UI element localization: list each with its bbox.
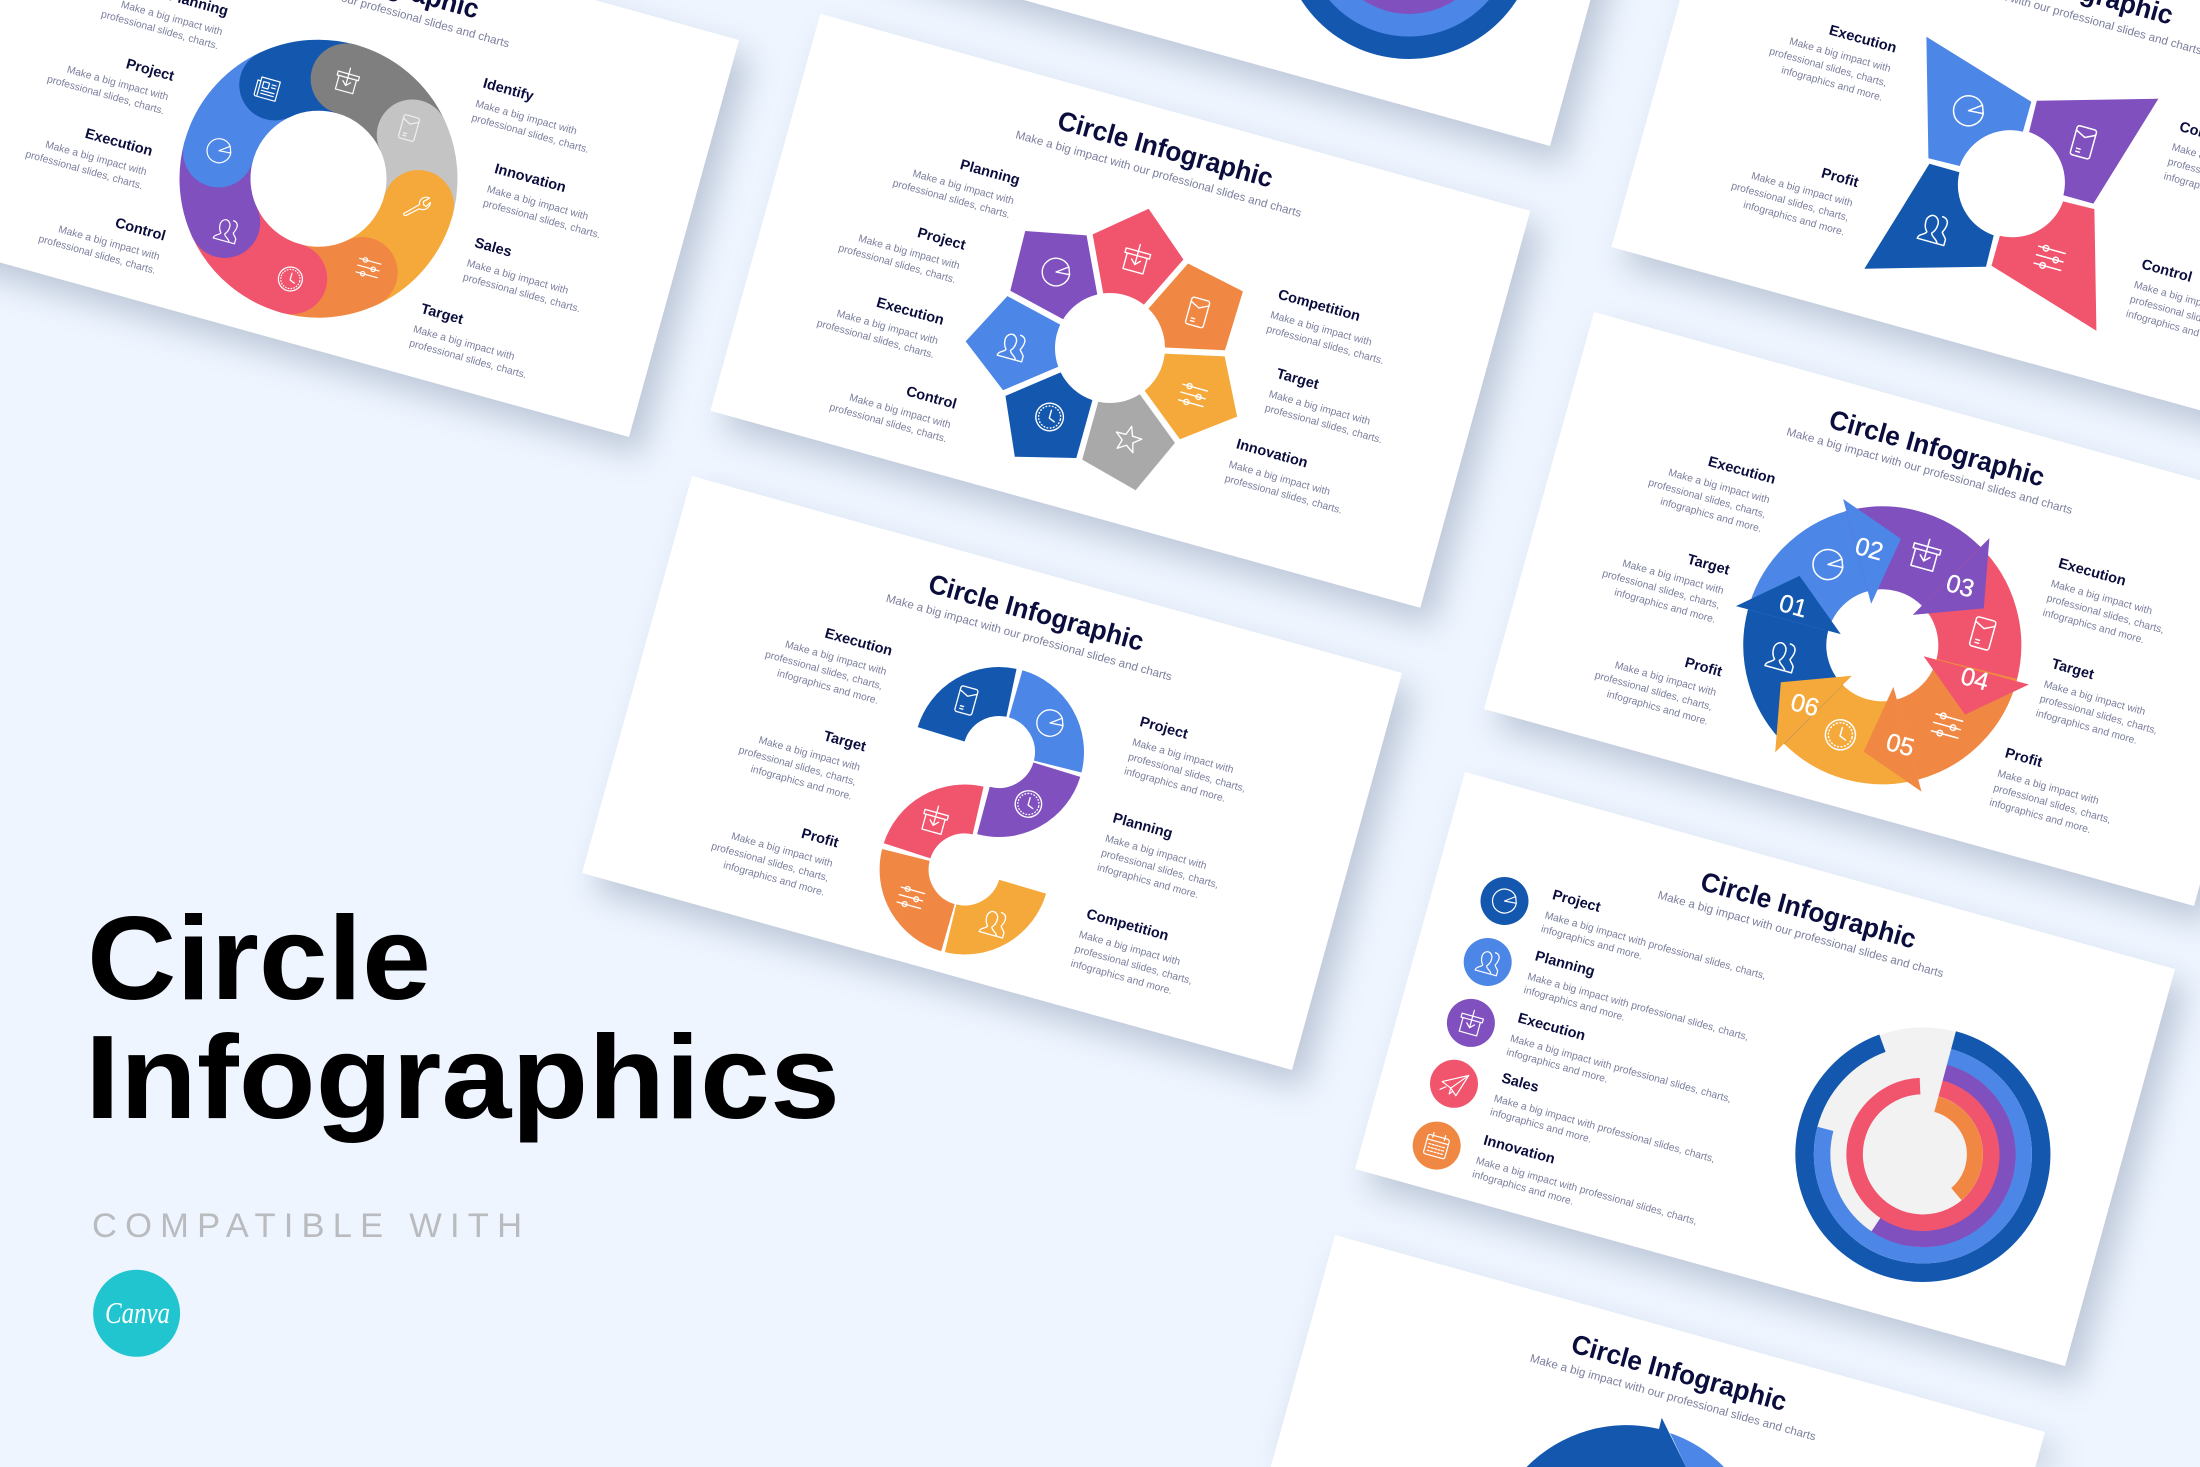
- panel: bottom slide partially visible: [1271, 1235, 2057, 1467]
- slide card: [710, 14, 1542, 626]
- label: Target left: Make a big impact with: [1621, 558, 1725, 597]
- label: Execution: [1764, 9, 1898, 104]
- star icons: [1917, 92, 2097, 273]
- legend item: Planning: infographics and more.: [1522, 985, 1626, 1024]
- label: Execution: professional slides, charts,: [1768, 46, 1888, 89]
- label: Control: [828, 365, 958, 445]
- label: Innovation: professional slides, charts.: [1223, 473, 1343, 517]
- label: Target: [733, 708, 868, 803]
- legend item: Innovation: Make a big impact with professional slides, charts,: [1475, 1156, 1698, 1227]
- S-curve icons: [897, 685, 1066, 938]
- subtitle: Make a big impact with our professional slides and charts: [1785, 426, 2074, 517]
- label: Execution right: infographics and more.: [2041, 608, 2145, 646]
- icon: Canva logo: Canva: [105, 1295, 170, 1330]
- legend item: Sales: Sales: [1500, 1070, 1540, 1096]
- circular arrows: [1736, 487, 2029, 803]
- label: Project: infographics and more.: [1123, 766, 1227, 805]
- label: Project: [46, 37, 176, 117]
- label: Competition: professional slides, charts,: [1073, 944, 1193, 987]
- donut chart: [175, 35, 462, 322]
- legend item: Planning: [1464, 938, 1756, 1057]
- label: Competition: Make a big impact with: [1269, 310, 1373, 349]
- label: Execution: Make a big impact with: [835, 309, 939, 347]
- label: Execution right: Make a big impact with: [2049, 579, 2154, 617]
- concentric rings: [1281, 0, 1537, 59]
- legend item: Project: [1480, 877, 1773, 996]
- label: Control: professional slides, charts.: [828, 402, 948, 445]
- label: Execution: [24, 112, 154, 192]
- label: Target: Target: [419, 301, 465, 328]
- label: Target right: Target: [2050, 656, 2096, 683]
- main heading: Infographics: [85, 1011, 840, 1144]
- label: Planning: professional slides, charts,: [1100, 848, 1220, 891]
- label: Innovation: [482, 161, 612, 241]
- label: Innovation: Make a big impact with: [1227, 460, 1331, 498]
- label: Profit left: Make a big impact with: [1613, 660, 1718, 699]
- panel: middle slide with S-curve: [582, 476, 1414, 1088]
- label: Profit: professional slides, charts,: [710, 841, 830, 884]
- label: Target right: Make a big impact with: [2042, 679, 2147, 718]
- label: Planning: Make a big impact with: [911, 169, 1015, 207]
- label: Profit: [706, 804, 840, 899]
- legend item: Innovation: Innovation: [1482, 1133, 1557, 1168]
- panel: right slide with circular arrows: [1484, 312, 2200, 924]
- legend item: Execution: [1447, 999, 1739, 1119]
- legend item: Sales: [1430, 1060, 1723, 1179]
- label: Execution left: Make a big impact with: [1667, 468, 1771, 506]
- label: Control: [37, 197, 167, 277]
- label: Competition: professional slides, charts.: [1265, 324, 1385, 367]
- label: Innovation: professional slides, charts.: [482, 198, 602, 241]
- label: Planning: [891, 141, 1022, 221]
- legend item: Planning: Make a big impact with professional slides, charts,: [1526, 972, 1750, 1043]
- label: Competition: infographics and more.: [1069, 958, 1173, 997]
- main heading: Circle: [87, 892, 431, 1025]
- label: Control: Make a big impact with: [57, 224, 161, 263]
- main heading: [85, 892, 840, 1144]
- legend item: Planning: Planning: [1533, 948, 1597, 980]
- label: Execution: Make a big impact with: [784, 639, 888, 678]
- label: Profit left: Profit: [1683, 655, 1724, 680]
- label: Execution: professional slides, charts.: [24, 149, 144, 192]
- label: Project: Make a big impact with: [66, 65, 170, 103]
- label: Project: Project: [1138, 714, 1190, 743]
- compatible with label: COMPATIBLE WITH: [92, 1207, 522, 1245]
- panel: top left slide with donut: [0, 0, 751, 455]
- label: Target: professional slides, charts.: [1264, 403, 1383, 446]
- label: Identify: [470, 75, 601, 156]
- label: Target: [408, 301, 538, 381]
- label: Profit: infographics and more.: [722, 860, 826, 899]
- label: Project: [1123, 714, 1257, 809]
- subtitle: Make a big impact with our professional slides and charts: [1656, 890, 1945, 980]
- label: Execution: infographics and more.: [1780, 65, 1884, 104]
- legend item: Execution: Execution: [1516, 1010, 1587, 1044]
- label: Profit: infographics and more.: [1742, 200, 1846, 238]
- donut icons: [204, 65, 432, 294]
- title: Circle Infographic: [925, 569, 1147, 657]
- label: Planning: Planning: [958, 157, 1022, 189]
- label: Project: professional slides, charts.: [46, 74, 166, 117]
- label: Project: Make a big impact with: [857, 233, 961, 272]
- panel: top right slide with four point star: [1612, 0, 2200, 462]
- star segments: [1864, 37, 2158, 331]
- arrow numbers: 02: [1852, 532, 1886, 566]
- label: Execution: Execution: [823, 626, 894, 660]
- label: Profit: professional slides, charts,: [1730, 181, 1850, 224]
- label: Sales: professional slides, charts.: [462, 272, 581, 315]
- label: Innovation: Innovation: [493, 161, 568, 196]
- label: Execution: professional slides, charts.: [815, 318, 935, 361]
- label: Profit left: [1589, 633, 1724, 728]
- label: Execution left: [1643, 440, 1777, 535]
- label: Target: Make a big impact with: [412, 324, 516, 363]
- label: Competition: Competition: [1276, 287, 1362, 325]
- label: Project: Make a big impact with: [1131, 737, 1235, 776]
- label: Profit left: professional slides, charts,: [1593, 670, 1713, 713]
- label: Competition: [1265, 286, 1395, 367]
- label: Sales: [462, 235, 592, 315]
- label: Target: [1264, 366, 1394, 446]
- label: Profit: Profit: [799, 826, 840, 851]
- label: Execution right: [2041, 555, 2176, 651]
- label: Project: professional slides, charts.: [837, 243, 957, 286]
- legend item: Innovation: infographics and more.: [1471, 1169, 1575, 1208]
- label: Control: Control: [113, 215, 167, 245]
- icon: Canva logo: [93, 1270, 180, 1357]
- label: Target: professional slides, charts.: [408, 338, 528, 381]
- label: Execution: Execution: [875, 295, 946, 329]
- label: Competition: Competition: [1085, 906, 1170, 944]
- label: Competition: [2162, 119, 2200, 214]
- label: Project: Project: [916, 225, 967, 254]
- legend item: Project: infographics and more.: [1540, 924, 1644, 962]
- label: Planning: professional slides, charts.: [100, 9, 220, 52]
- panel: lower right slide with radial bars: [1355, 772, 2187, 1384]
- pentagon segments: [963, 196, 1261, 499]
- legend item: Project: Project: [1551, 887, 1602, 916]
- subtitle: Make a big impact with our professional slides and charts: [1529, 1353, 1817, 1444]
- label: Target left: infographics and more.: [1613, 587, 1717, 626]
- arrow icons: [1765, 536, 1996, 753]
- label: Execution right: Execution: [2057, 556, 2128, 590]
- label: Profit: Make a big impact with: [730, 831, 834, 870]
- label: Execution: [760, 612, 894, 707]
- label: Execution: Execution: [1827, 23, 1898, 57]
- legend item: Project: Make a big impact with professional slides, charts,: [1543, 910, 1767, 982]
- arrow numbers: 06: [1788, 688, 1822, 722]
- label: Execution: Make a big impact with: [44, 140, 148, 178]
- label: Competition: [1069, 906, 1204, 1001]
- label: Target: Make a big impact with: [1267, 389, 1372, 428]
- label: Control: Control: [2140, 257, 2194, 286]
- slide card: [1355, 772, 2187, 1384]
- title: Circle Infographic: [1054, 105, 1276, 193]
- label: Target left: professional slides, charts,: [1601, 568, 1721, 611]
- label: Profit right: Profit: [2003, 745, 2044, 771]
- label: Competition: Make a big impact with: [1077, 930, 1182, 968]
- label: Target right: [2034, 656, 2169, 751]
- label: Target: infographics and more.: [749, 764, 853, 803]
- label: Execution: [815, 281, 946, 361]
- label: Sales: Make a big impact with: [465, 258, 570, 297]
- label: Control: professional slides, charts.: [37, 234, 157, 277]
- label: Planning: infographics and more.: [1096, 862, 1200, 901]
- label: Planning: [1096, 810, 1230, 905]
- subtitle: Make a big impact with our professional slides and charts: [1014, 129, 1303, 220]
- label: Execution: Execution: [83, 126, 154, 160]
- legend item: Innovation: [1413, 1122, 1705, 1241]
- title: Circle Infographic: [1568, 1329, 1790, 1417]
- slide card: [0, 0, 751, 455]
- label: Planning: Make a big impact with: [1104, 834, 1208, 872]
- label: Identify: Make a big impact with: [474, 99, 578, 137]
- slide card: [582, 476, 1414, 1088]
- label: Target right: infographics and more.: [2034, 708, 2138, 747]
- radial bar chart: [1778, 1010, 2068, 1299]
- label: Project: Project: [124, 56, 176, 85]
- label: Project: professional slides, charts,: [1127, 752, 1247, 795]
- slide card: [840, 0, 1672, 164]
- label: Target: Target: [1275, 366, 1321, 393]
- label: Execution: infographics and more.: [776, 668, 880, 707]
- label: Profit left: infographics and more.: [1605, 689, 1709, 728]
- title: Circle Infographic: [1697, 866, 1919, 954]
- title: Circle Infographic: [1826, 404, 2048, 492]
- partial arrow circle: [1526, 1418, 1724, 1467]
- panel: top center slide with concentric rings: [840, 0, 1672, 164]
- label: Planning: professional slides, charts.: [891, 178, 1011, 221]
- label: Target left: [1597, 531, 1731, 626]
- legend item: Execution: infographics and more.: [1505, 1047, 1609, 1086]
- arrow numbers: 04: [1958, 662, 1992, 697]
- label: Profit right: [1988, 745, 2123, 840]
- label: Innovation: Make a big impact with: [486, 184, 590, 223]
- label: Identify: professional slides, charts.: [470, 113, 590, 156]
- label: Execution left: Execution: [1706, 454, 1777, 488]
- label: Target: Make a big impact with: [757, 735, 861, 774]
- label: Control: Make a big impact with: [848, 393, 952, 431]
- subtitle: Make a big impact with our professional slides and charts: [885, 593, 1173, 684]
- label: Profit: Profit: [1819, 166, 1860, 191]
- label: Profit: Make a big impact with: [1750, 171, 1854, 210]
- label: Execution left: professional slides, charts,: [1647, 478, 1767, 521]
- label: Execution: professional slides, charts,: [764, 649, 884, 692]
- label: Target left: Target: [1685, 552, 1731, 579]
- label: Innovation: Innovation: [1234, 436, 1309, 471]
- arrow numbers: 03: [1943, 569, 1977, 603]
- label: Profit right: infographics and more.: [1988, 797, 2092, 836]
- legend item: Execution: Make a big impact with professional slides, charts,: [1509, 1034, 1732, 1105]
- label: Target right: professional slides, charts,: [2038, 694, 2158, 737]
- label: Project: [837, 206, 967, 286]
- slide card: [1612, 0, 2200, 462]
- label: Planning: Make a big impact with: [120, 0, 224, 38]
- arrow numbers: 05: [1883, 728, 1917, 762]
- label: Identify: Identify: [481, 76, 535, 105]
- label: Target: Target: [822, 728, 868, 755]
- slide card: [1271, 1235, 2057, 1467]
- label: Execution: Make a big impact with: [1788, 36, 1892, 75]
- label: Profit right: Make a big impact with: [1996, 769, 2100, 807]
- legend item: Sales: infographics and more.: [1489, 1107, 1593, 1146]
- S-curve segments: [888, 676, 1075, 946]
- label: Innovation: [1223, 436, 1354, 517]
- label: Control: [2125, 256, 2200, 352]
- label: Profit right: professional slides, charts,: [1992, 783, 2112, 826]
- arrow numbers: 01: [1776, 589, 1810, 623]
- label: Control: Control: [904, 384, 958, 413]
- label: Execution right: professional slides, charts,: [2045, 593, 2165, 636]
- label: Planning: Planning: [1111, 810, 1174, 842]
- label: Profit: [1726, 143, 1860, 238]
- label: Target: professional slides, charts,: [737, 745, 857, 788]
- legend item: Sales: Make a big impact with professional slides, charts,: [1492, 1094, 1716, 1165]
- label: Sales: Sales: [473, 235, 513, 261]
- label: Execution left: infographics and more.: [1659, 496, 1763, 535]
- slide card: [1484, 312, 2200, 924]
- pentagon icons: [997, 241, 1210, 454]
- panel: center slide with heptagon flower: [710, 14, 1542, 626]
- arrow numbers: [1776, 532, 1992, 762]
